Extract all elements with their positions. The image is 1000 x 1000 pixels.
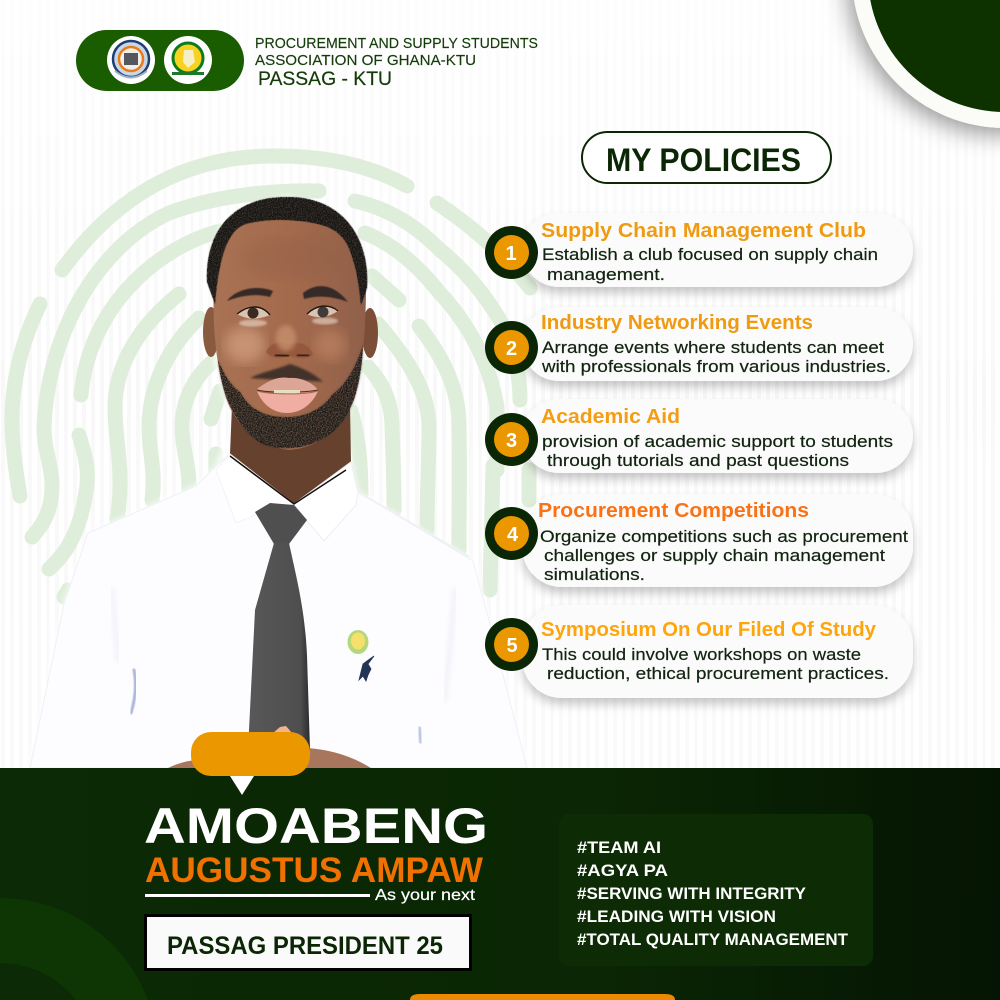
corner circle xyxy=(852,0,1000,128)
policy 3 xyxy=(485,399,913,473)
policy 1: 1 xyxy=(505,243,517,265)
policy 1: management. xyxy=(547,265,665,284)
policy 5: Symposium On Our Filed Of Study xyxy=(541,618,877,641)
header text: PROCUREMENT AND SUPPLY STUDENTS xyxy=(255,36,538,52)
skin highlights xyxy=(225,327,265,363)
collar xyxy=(216,454,294,523)
policy 3: provision of academic support to students xyxy=(542,432,893,451)
face xyxy=(214,205,366,450)
lapel pin xyxy=(348,630,368,654)
bottom orange tab xyxy=(410,994,675,1000)
hashtags panel: #TEAM AI xyxy=(577,838,661,857)
policy 2: Industry Networking Events xyxy=(541,311,813,334)
policy 1: Establish a club focused on supply chain xyxy=(542,245,878,264)
header logo pill xyxy=(76,30,244,91)
policy 3: 3 xyxy=(506,430,517,452)
neck xyxy=(230,405,351,504)
portrait of candidate xyxy=(30,197,527,768)
footer band xyxy=(0,768,1000,1000)
shirt xyxy=(30,454,527,768)
ears xyxy=(203,307,219,357)
hashtags panel: #SERVING WITH INTEGRITY xyxy=(577,884,807,903)
policy 4: 4 xyxy=(507,524,519,546)
hands xyxy=(168,748,371,768)
policy 2: Arrange events where students can meet xyxy=(542,338,884,357)
polo logo xyxy=(359,656,374,681)
fingerprint graphic xyxy=(12,156,530,597)
policy 5: reduction, ethical procurement practices. xyxy=(547,664,889,683)
hashtags panel: #LEADING WITH VISION xyxy=(577,907,776,926)
soft halo xyxy=(30,197,527,768)
policy 4: Procurement Competitions xyxy=(538,499,809,522)
policy 5: 5 xyxy=(506,635,518,657)
eyebrows xyxy=(227,286,348,302)
neckline xyxy=(230,456,346,504)
policy 5: This could involve workshops on waste xyxy=(542,645,861,664)
policy 4 xyxy=(485,494,913,587)
policy 2 xyxy=(485,307,913,381)
hashtags panel xyxy=(559,814,873,966)
eyes xyxy=(237,308,270,319)
policy 4: simulations. xyxy=(544,565,645,584)
candidate name: AMOABENG xyxy=(144,798,488,854)
heading: my policies: MY POLICIES xyxy=(606,142,801,178)
hashtags panel: #AGYA PA xyxy=(577,861,668,880)
necktie xyxy=(255,503,307,544)
header text xyxy=(255,36,538,90)
beard xyxy=(218,345,363,448)
policy 5 xyxy=(485,605,913,698)
shirt shading xyxy=(112,492,468,742)
heading: my policies xyxy=(582,132,831,183)
policy 2: with professionals from various industries. xyxy=(541,357,891,376)
policy 3: Academic Aid xyxy=(541,405,680,428)
header text: ASSOCIATION OF GHANA-KTU xyxy=(255,53,476,69)
president box xyxy=(146,916,470,970)
president box: PASSAG PRESIDENT 25 xyxy=(167,932,443,960)
policy 3: through tutorials and past questions xyxy=(547,451,849,470)
logo: university crest xyxy=(107,36,155,84)
tagline rule and text: As your next xyxy=(375,887,476,904)
tagline rule and text xyxy=(145,887,476,904)
hair xyxy=(207,197,367,305)
policy 2: 2 xyxy=(506,338,517,360)
policy 1 xyxy=(485,213,913,287)
mouth xyxy=(257,377,318,394)
nose xyxy=(266,343,313,358)
policy 4: Organize competitions such as procurement xyxy=(540,527,908,546)
candidate name: AUGUSTUS AMPAW xyxy=(145,851,483,890)
header text: PASSAG - KTU xyxy=(258,69,392,90)
policy 4: challenges or supply chain management xyxy=(544,546,885,565)
background stripes xyxy=(0,0,1000,770)
policy 1: Supply Chain Management Club xyxy=(541,219,866,242)
orange speech tag xyxy=(191,732,310,795)
finger tip xyxy=(273,726,292,733)
logo: association crest xyxy=(164,36,212,84)
hashtags panel: #TOTAL QUALITY MANAGEMENT xyxy=(577,930,849,949)
candidate name xyxy=(144,798,488,890)
